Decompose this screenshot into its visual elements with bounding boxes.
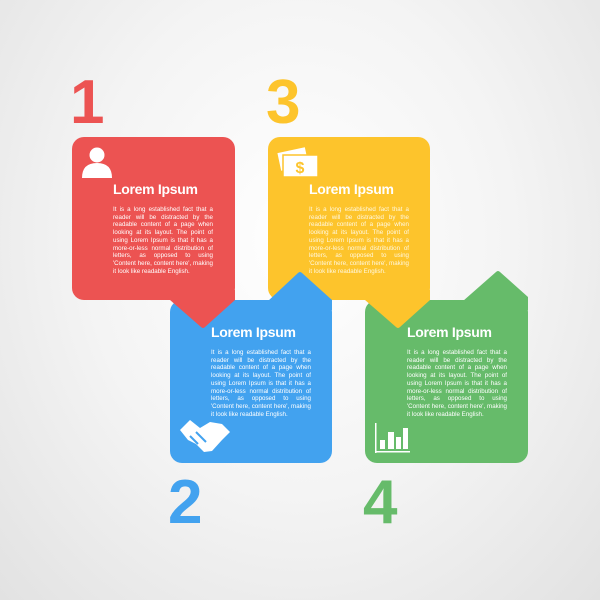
text: yellow: It is a long established fact that a reader will be distracted by the readable content of a page when looking at its layout. The point of using Lorem Ipsum is that it has a more-or-less normal distribution of letters, as opposed to using 'Content here, content here', making it look like readable English. [309, 206, 409, 275]
text: green: It is a long established fact that a reader will be distracted by the readable content of a page when looking at its layout. The point of using Lorem Ipsum is that it has a more-or-less normal distribution of letters, as opposed to using 'Content here, content here', making it look like readable English. [407, 349, 507, 418]
icon: bar chart [375, 423, 410, 453]
panel: blue box [170, 272, 332, 463]
number 1: 1 [70, 68, 104, 137]
panel: yellow box [268, 137, 430, 328]
panel: green box [365, 271, 528, 463]
icon: money: $ [296, 160, 305, 177]
number 2: 2 [168, 468, 202, 537]
heading: yellow: Lorem Ipsum [309, 181, 394, 197]
heading: blue: Lorem Ipsum [211, 324, 296, 340]
panel: red box [72, 137, 235, 328]
icon: handshake [180, 420, 230, 452]
number 3: 3 [266, 68, 300, 137]
icon: money [277, 147, 318, 177]
heading: red: Lorem Ipsum [113, 181, 198, 197]
number 4: 4 [363, 468, 397, 537]
icon: person [82, 148, 112, 178]
text: blue: It is a long established fact that a reader will be distracted by the readable content of a page when looking at its layout. The point of using Lorem Ipsum is that it has a more-or-less normal distribution of letters, as opposed to using 'Content here, content here', making it look like readable English. [211, 349, 311, 418]
text: red: It is a long established fact that a reader will be distracted by the readable content of a page when looking at its layout. The point of using Lorem Ipsum is that it has a more-or-less normal distribution of letters, as opposed to using 'Content here, content here', making it look like readable English. [113, 206, 213, 275]
heading: green: Lorem Ipsum [407, 324, 492, 340]
